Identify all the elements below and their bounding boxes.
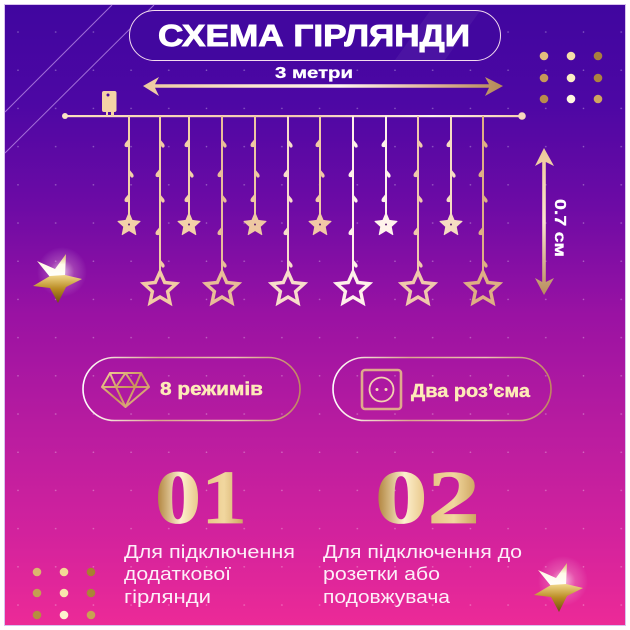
description 01: Для підключення: [124, 541, 295, 562]
label: Два роз’єма: [411, 381, 531, 401]
icon: gold star left: [33, 247, 87, 303]
description 02: [323, 541, 522, 607]
width label: 3 метри: [275, 65, 353, 82]
main wire: [62, 112, 526, 120]
long strands with outline stars: [144, 116, 499, 303]
description 02: розетки або: [323, 563, 440, 584]
description 01: [124, 541, 295, 607]
short strands with small stars: [118, 116, 462, 235]
title text: СХЕМА ГІРЛЯНДИ: [158, 18, 470, 53]
number 01: 01: [155, 456, 247, 540]
plug: [102, 91, 116, 116]
title pill: [130, 10, 500, 60]
description 02: подовжувача: [323, 586, 451, 607]
description 01: гірлянди: [124, 586, 211, 607]
garland diagram: [62, 91, 526, 303]
height label: 0.7 см: [551, 199, 568, 257]
description 01: додаткової: [124, 563, 231, 584]
decorative diagonal lines: [5, 5, 154, 153]
description 02: Для підключення до: [323, 541, 522, 562]
dots: top right: [540, 52, 602, 103]
icon: socket: [362, 370, 401, 409]
icon: diamond: [102, 373, 149, 407]
arrow: 3 metres width: [143, 77, 503, 96]
arrow: 0.7 m height: [535, 148, 554, 295]
badge: 8 modes: [83, 358, 300, 420]
badge: two sockets: [333, 358, 551, 420]
label: 8 режимів: [160, 379, 263, 399]
dots: bottom left: [33, 568, 95, 619]
icon: gold star right: [534, 556, 588, 612]
number 02: 02: [375, 456, 480, 540]
